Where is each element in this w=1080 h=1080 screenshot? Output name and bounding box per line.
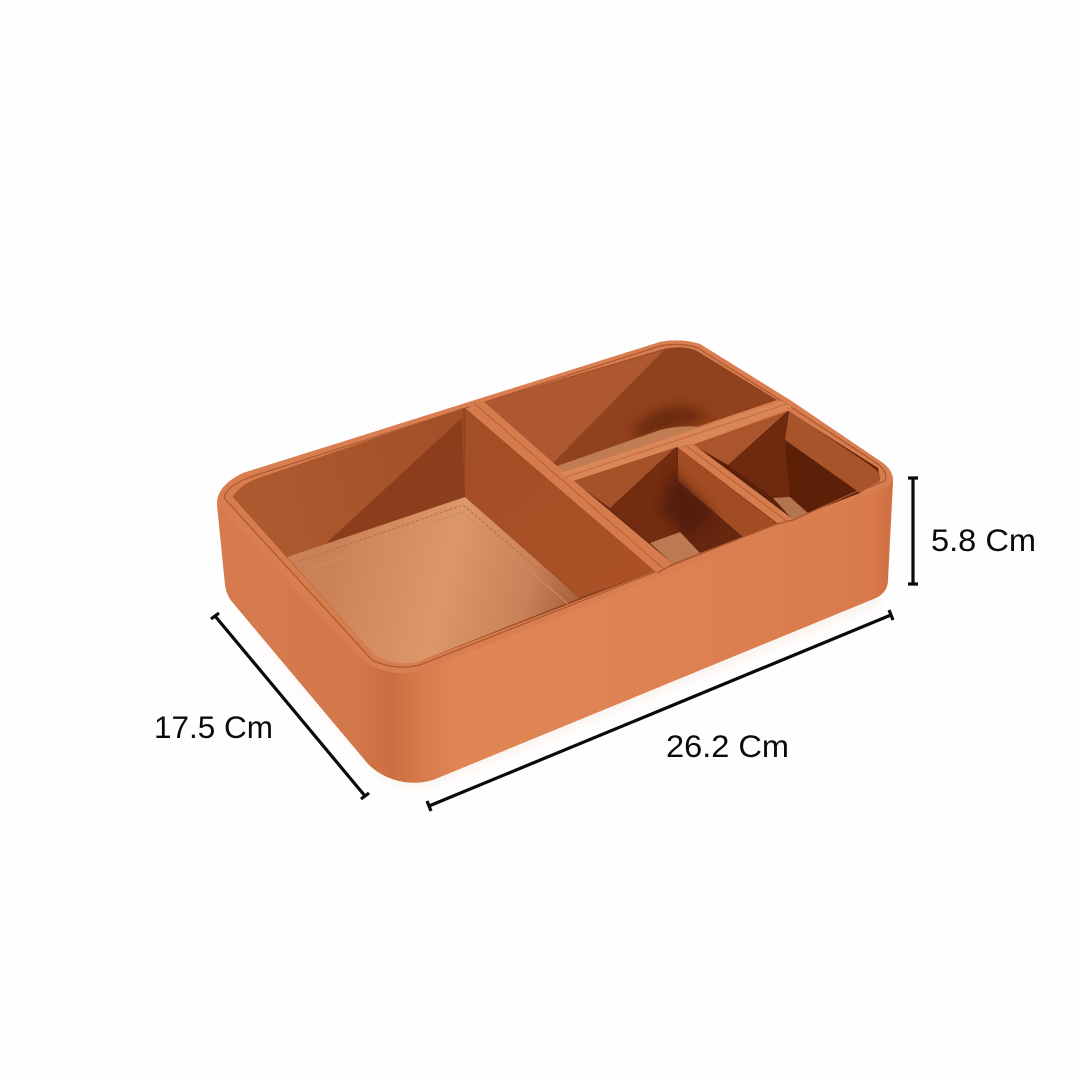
dark shadow patch [632,406,708,438]
inner tray edge line [224,344,886,667]
panel: upper right compartment [484,347,777,474]
deep shadow [660,470,715,538]
panel: small right compartment [693,411,880,520]
small divider rim [677,444,794,525]
dimension: height [908,478,1036,584]
dimension: width [427,610,893,811]
visible floor [773,497,808,520]
visible floor [650,532,700,563]
right wall upper [678,448,776,537]
back wall [484,350,664,468]
leather floor [287,497,580,663]
back wall shadow [287,418,465,557]
compartment base [484,347,777,473]
right wall lower [785,440,860,513]
panel: small centre compartment [573,447,777,563]
height bracket [908,478,918,584]
tray shadow [240,590,880,786]
main divider centre line [474,403,665,570]
depth label: 17.5 Cm [154,709,273,745]
panel: large compartment [233,408,655,663]
compartment base [233,408,655,662]
height label: 5.8 Cm [931,522,1036,558]
back wall dark [610,449,680,543]
tray body [210,335,900,790]
back wall light [693,411,788,465]
floor seam [315,512,568,604]
back wall dark [728,412,790,498]
small divider line [685,445,788,522]
compartment base [693,411,880,520]
top rim [217,340,893,673]
depth bracket [211,613,369,799]
product: leather tray [210,335,900,790]
cross divider line [566,404,787,477]
dividers [466,401,880,574]
width bracket [427,610,893,811]
compartment base [573,447,777,563]
front rim inner edge [657,481,880,573]
dimension: depth [154,613,369,799]
wall shadow [553,349,777,468]
floor stitching [293,505,574,600]
right wall upper [785,411,880,493]
back wall light [573,447,676,508]
right wall lower [678,481,743,553]
visible floor [557,426,700,474]
back wall light [233,408,465,557]
cross divider rim [560,401,792,481]
main divider rim [466,401,673,574]
divider wall [465,408,655,597]
width label: 26.2 Cm [666,728,789,764]
